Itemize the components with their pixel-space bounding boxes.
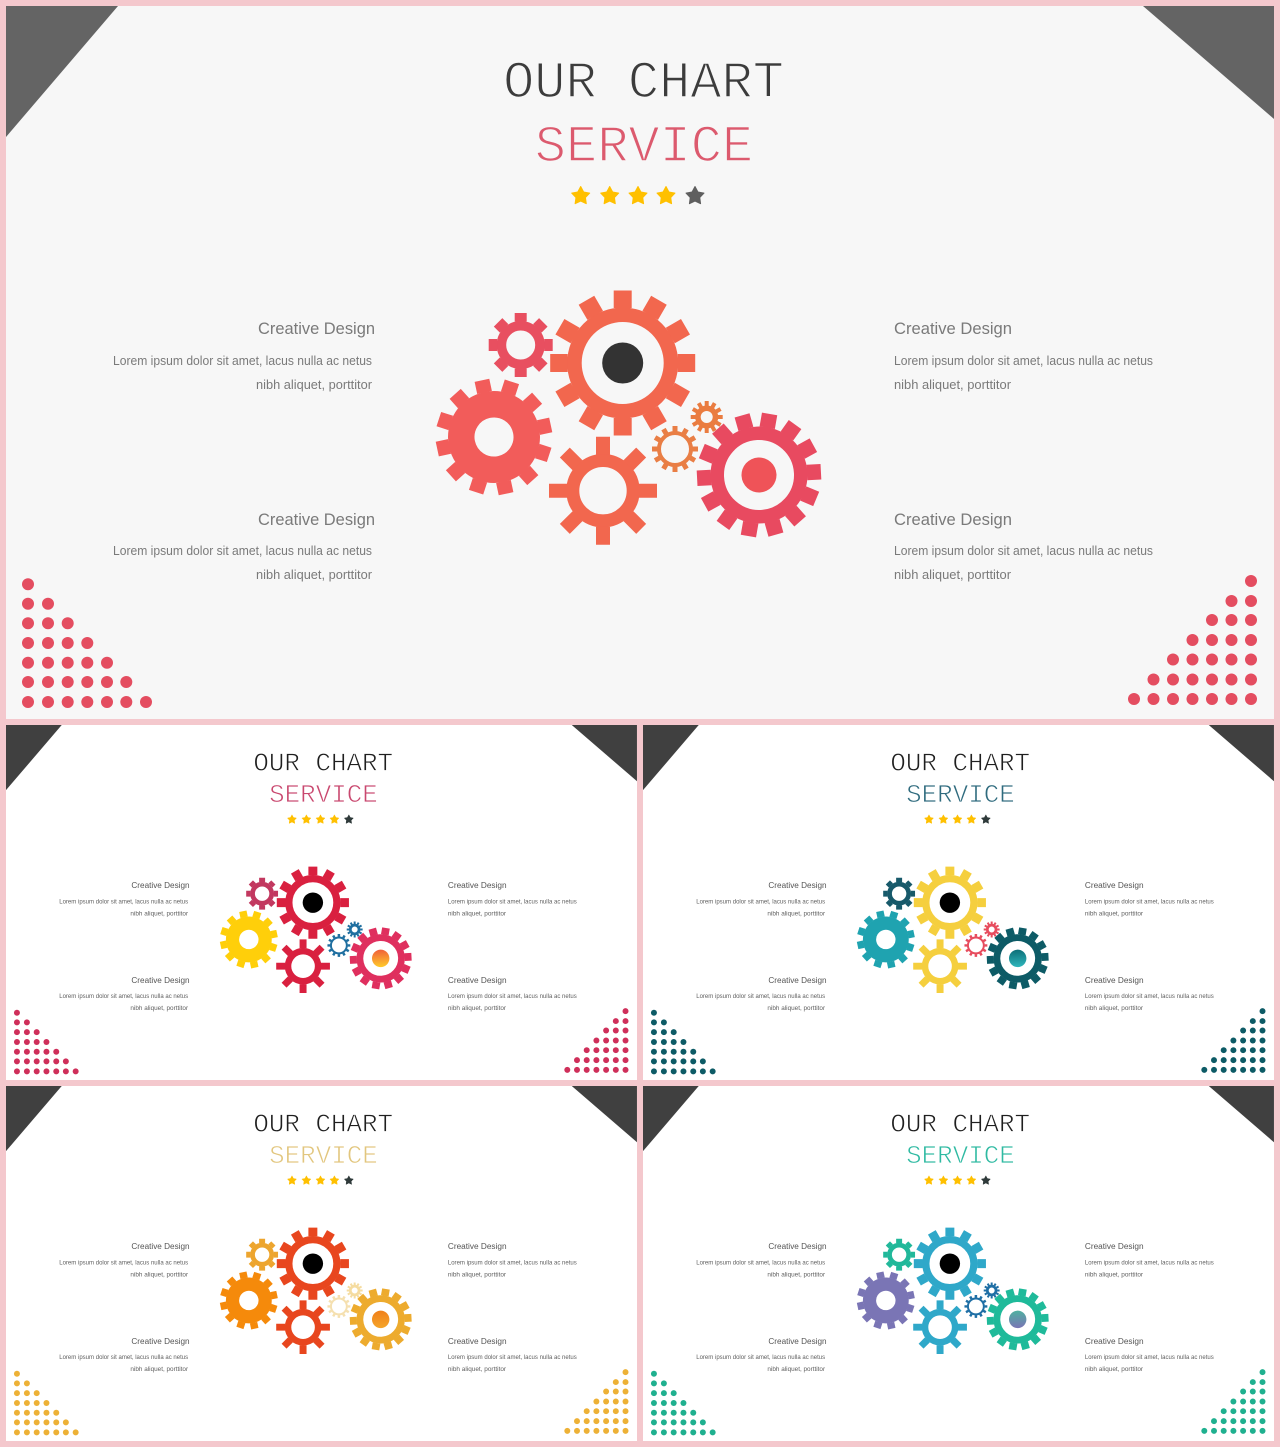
text blocks xyxy=(59,1241,577,1373)
gear cluster xyxy=(852,1228,1050,1354)
panel: main slide xyxy=(6,6,1274,719)
text blocks: nibh aliquet, porttitor xyxy=(130,1272,188,1279)
title: OUR CHART xyxy=(503,54,784,113)
text blocks: Lorem ipsum dolor sit amet, lacus nulla ac netus xyxy=(59,899,188,906)
text blocks: nibh aliquet, porttitor xyxy=(448,1272,506,1279)
text blocks: Creative Design xyxy=(1085,1336,1144,1346)
text blocks: Creative Design xyxy=(131,975,190,985)
text blocks: nibh aliquet, porttitor xyxy=(1085,911,1143,918)
text blocks: Lorem ipsum dolor sit amet, lacus nulla ac netus xyxy=(59,993,188,1000)
text blocks: Lorem ipsum dolor sit amet, lacus nulla ac netus xyxy=(448,899,577,906)
text blocks: Creative Design xyxy=(131,880,190,890)
text blocks: nibh aliquet, porttitor xyxy=(767,911,825,918)
text blocks: Lorem ipsum dolor sit amet, lacus nulla ac netus xyxy=(1085,1260,1214,1267)
dot triangle bottom left xyxy=(14,1371,79,1435)
text blocks: Lorem ipsum dolor sit amet, lacus nulla ac netus xyxy=(1085,993,1214,1000)
text block: top right: Lorem ipsum dolor sit amet, lacus nulla ac netus xyxy=(894,354,1153,368)
gear cluster xyxy=(425,290,824,545)
subtitle: SERVICE xyxy=(269,780,378,810)
text blocks: nibh aliquet, porttitor xyxy=(448,911,506,918)
text block: bottom right xyxy=(894,510,1153,582)
text blocks: Lorem ipsum dolor sit amet, lacus nulla ac netus xyxy=(448,1354,577,1361)
text block: bottom left xyxy=(113,510,375,582)
gear cluster xyxy=(215,867,413,993)
text blocks: nibh aliquet, porttitor xyxy=(448,1005,506,1012)
star rating xyxy=(924,1176,990,1184)
corner triangle top left xyxy=(6,725,62,790)
text blocks: nibh aliquet, porttitor xyxy=(130,911,188,918)
text blocks: Lorem ipsum dolor sit amet, lacus nulla ac netus xyxy=(1085,899,1214,906)
star rating xyxy=(924,815,990,823)
text blocks: nibh aliquet, porttitor xyxy=(1085,1366,1143,1373)
text blocks: Creative Design xyxy=(1085,1241,1144,1251)
subtitle: SERVICE xyxy=(535,118,753,177)
dot triangle bottom right xyxy=(1201,1369,1265,1434)
text block: top left: nibh aliquet, porttitor xyxy=(256,378,372,392)
text block: bottom left: nibh aliquet, porttitor xyxy=(256,568,372,582)
text blocks: Lorem ipsum dolor sit amet, lacus nulla ac netus xyxy=(448,1260,577,1267)
text blocks: Creative Design xyxy=(448,1336,507,1346)
title: OUR CHART xyxy=(890,1109,1030,1139)
text blocks xyxy=(59,880,577,1012)
dot triangle bottom left xyxy=(651,1371,716,1435)
dot triangle bottom left xyxy=(22,578,152,708)
text block: top left: Lorem ipsum dolor sit amet, lacus nulla ac netus xyxy=(113,354,372,368)
text block: bottom left: Creative Design xyxy=(258,510,375,529)
star rating xyxy=(572,186,704,204)
text block: bottom right: Creative Design xyxy=(894,510,1012,529)
text block: top left: Creative Design xyxy=(258,319,375,338)
corner triangle top right xyxy=(1209,1086,1274,1142)
title: OUR CHART xyxy=(253,748,393,778)
corner triangle top left xyxy=(643,725,699,790)
corner triangle top left xyxy=(6,1086,62,1151)
text blocks: Creative Design xyxy=(768,975,827,985)
text blocks: Creative Design xyxy=(448,1241,507,1251)
text block: top right: nibh aliquet, porttitor xyxy=(894,378,1011,392)
text blocks: Lorem ipsum dolor sit amet, lacus nulla ac netus xyxy=(696,993,825,1000)
corner triangle top left xyxy=(643,1086,699,1151)
text blocks: Lorem ipsum dolor sit amet, lacus nulla ac netus xyxy=(448,993,577,1000)
text blocks: Lorem ipsum dolor sit amet, lacus nulla ac netus xyxy=(1085,1354,1214,1361)
dot triangle bottom right xyxy=(564,1008,628,1073)
corner triangle top right xyxy=(572,725,637,781)
dot triangle bottom right xyxy=(1201,1008,1265,1073)
title: OUR CHART xyxy=(253,1109,393,1139)
gear cluster xyxy=(852,867,1050,993)
text blocks: nibh aliquet, porttitor xyxy=(448,1366,506,1373)
text blocks: Lorem ipsum dolor sit amet, lacus nulla ac netus xyxy=(696,1354,825,1361)
subtitle: SERVICE xyxy=(269,1141,378,1171)
text block: top right: Creative Design xyxy=(894,319,1012,338)
subtitle: SERVICE xyxy=(906,1141,1015,1171)
text blocks: Creative Design xyxy=(768,1241,827,1251)
panel: teal variant xyxy=(643,725,1274,1080)
gear cluster xyxy=(215,1228,413,1354)
dot triangle bottom right xyxy=(1128,575,1257,705)
panel: green-blue variant xyxy=(643,1086,1274,1441)
text blocks xyxy=(696,1241,1214,1373)
corner triangle top right xyxy=(572,1086,637,1142)
text blocks: Lorem ipsum dolor sit amet, lacus nulla ac netus xyxy=(59,1260,188,1267)
text block: bottom right: Lorem ipsum dolor sit amet, lacus nulla ac netus xyxy=(894,544,1153,558)
text block: bottom right: nibh aliquet, porttitor xyxy=(894,568,1011,582)
text block: top right xyxy=(894,319,1153,392)
text blocks: Creative Design xyxy=(768,880,827,890)
panel: amber variant xyxy=(6,1086,637,1441)
text block: bottom left: Lorem ipsum dolor sit amet, lacus nulla ac netus xyxy=(113,544,372,558)
text blocks: Creative Design xyxy=(1085,975,1144,985)
text blocks: nibh aliquet, porttitor xyxy=(767,1366,825,1373)
text block: top left xyxy=(113,319,375,392)
text blocks: Lorem ipsum dolor sit amet, lacus nulla ac netus xyxy=(59,1354,188,1361)
text blocks: Lorem ipsum dolor sit amet, lacus nulla ac netus xyxy=(696,1260,825,1267)
text blocks: Lorem ipsum dolor sit amet, lacus nulla ac netus xyxy=(696,899,825,906)
corner triangle top right xyxy=(1143,6,1274,119)
text blocks: Creative Design xyxy=(131,1336,190,1346)
text blocks: Creative Design xyxy=(131,1241,190,1251)
text blocks: Creative Design xyxy=(448,880,507,890)
text blocks xyxy=(696,880,1214,1012)
corner triangle top right xyxy=(1209,725,1274,781)
title: OUR CHART xyxy=(890,748,1030,778)
text blocks: nibh aliquet, porttitor xyxy=(767,1005,825,1012)
text blocks: Creative Design xyxy=(1085,880,1144,890)
text blocks: nibh aliquet, porttitor xyxy=(767,1272,825,1279)
text blocks: nibh aliquet, porttitor xyxy=(1085,1272,1143,1279)
dot triangle bottom left xyxy=(14,1010,79,1074)
subtitle: SERVICE xyxy=(906,780,1015,810)
star rating xyxy=(287,815,353,823)
dot triangle bottom left xyxy=(651,1010,716,1074)
text blocks: nibh aliquet, porttitor xyxy=(130,1005,188,1012)
dot triangle bottom right xyxy=(564,1369,628,1434)
text blocks: Creative Design xyxy=(448,975,507,985)
text blocks: nibh aliquet, porttitor xyxy=(130,1366,188,1373)
panel: crimson variant xyxy=(6,725,637,1080)
text blocks: Creative Design xyxy=(768,1336,827,1346)
corner triangle top left xyxy=(6,6,118,137)
star rating xyxy=(287,1176,353,1184)
text blocks: nibh aliquet, porttitor xyxy=(1085,1005,1143,1012)
